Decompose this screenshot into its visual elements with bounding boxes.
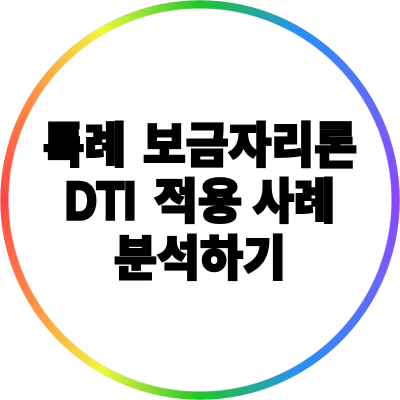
title line 2: 사례	[253, 176, 335, 229]
title line 1	[43, 120, 357, 173]
title line 1: 특례	[43, 120, 126, 173]
title line 3: 분석하기	[114, 233, 286, 286]
title line 2	[65, 172, 335, 231]
title line 1: 보금자리론	[143, 120, 357, 173]
title line 2: 적용	[154, 176, 242, 229]
title line 2: DTI	[65, 172, 136, 231]
